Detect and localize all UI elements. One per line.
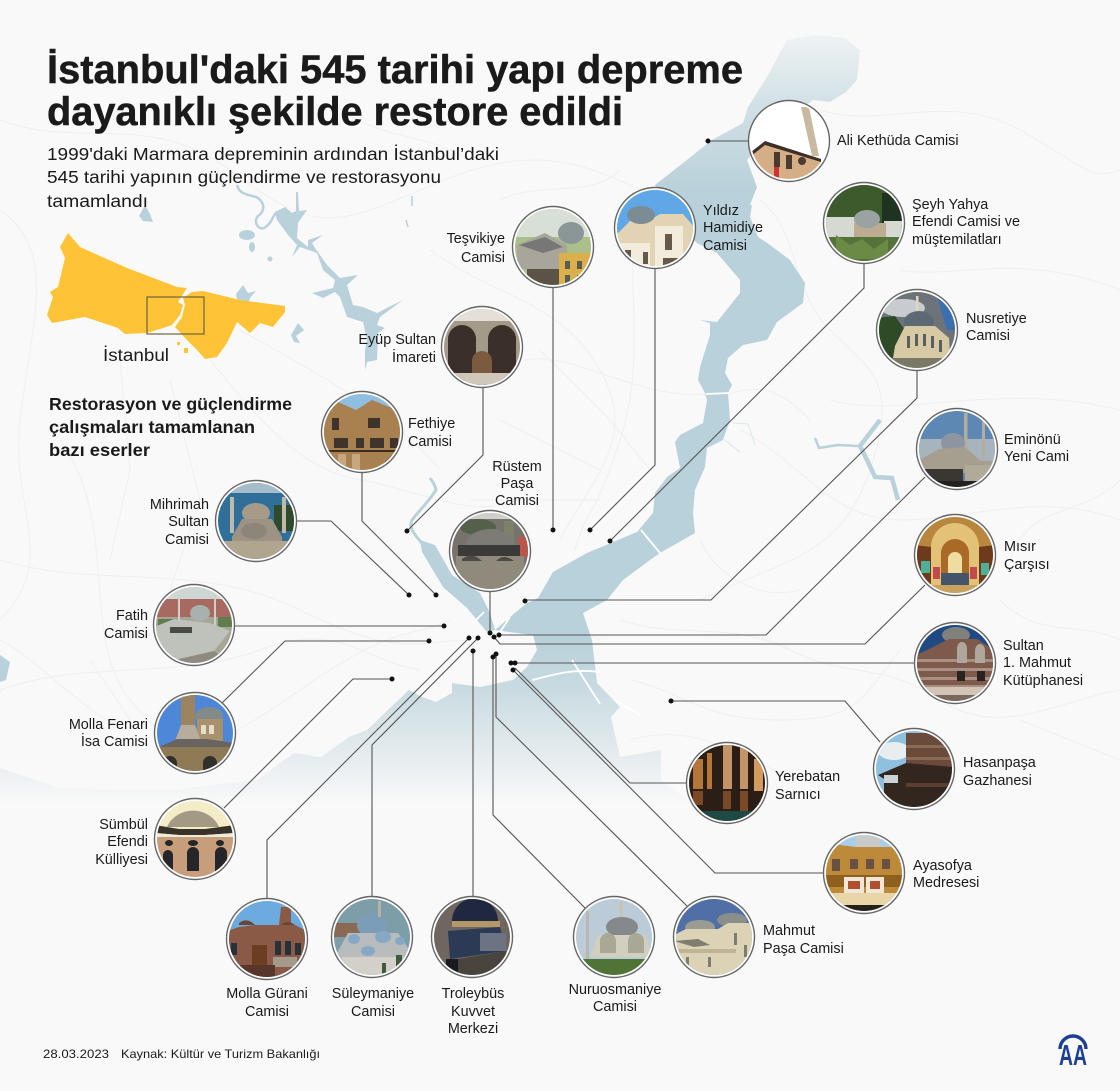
landmark: Sümbül Efendi Külliyesi: Külliyesi bbox=[95, 852, 148, 868]
landmark: Rüstem Paşa Camisi bbox=[450, 459, 542, 592]
landmark: Hasanpaşa Gazhanesi bbox=[874, 728, 1036, 810]
landmark: Molla Fenari İsa Camisi bbox=[69, 692, 236, 774]
landmark: Mısır Çarşısı: Mısır bbox=[1004, 539, 1036, 555]
map: water (Bosphorus, Golden Horn, Marmara, reservoirs) bbox=[0, 35, 898, 810]
landmark: Şeyh Yahya Efendi Camisi ve müştemilatları: Efendi Camisi ve bbox=[912, 214, 1020, 230]
landmark: Nuruosmaniye Camisi bbox=[569, 896, 661, 1015]
landmark: Eyüp Sultan İmareti: Eyüp Sultan bbox=[358, 332, 436, 348]
landmark: Hasanpaşa Gazhanesi: Gazhanesi bbox=[963, 773, 1032, 789]
landmark: Sultan 1. Mahmut Kütüphanesi: Kütüphanesi bbox=[1003, 673, 1083, 689]
landmark: Mısır Çarşısı bbox=[914, 514, 1050, 596]
logo: AA: AA bbox=[1059, 1040, 1087, 1072]
footer: date and source: 28.03.2023 bbox=[43, 1047, 109, 1061]
heading: restored works bbox=[49, 394, 292, 460]
subtitle: 545 tarihi yapının güçlendirme ve restorasyonu bbox=[47, 167, 441, 187]
map: roads bbox=[0, 100, 1120, 780]
landmark: Mihrimah Sultan Camisi: Sultan bbox=[168, 514, 209, 530]
landmark: Fethiye Camisi bbox=[322, 392, 455, 472]
landmark: Rüstem Paşa Camisi: Paşa bbox=[501, 476, 533, 492]
landmark: Fatih Camisi bbox=[104, 584, 234, 666]
heading: restored works: Restorasyon ve güçlendirme bbox=[49, 394, 292, 414]
landmark: Sultan 1. Mahmut Kütüphanesi bbox=[914, 622, 1083, 704]
landmark: Yıldız Hamidiye Camisi: Yıldız bbox=[703, 203, 739, 219]
landmark: Ali Kethüda Camisi: Ali Kethüda Camisi bbox=[837, 133, 959, 149]
landmark: Troleybüs Kuvvet Merkezi: Troleybüs bbox=[442, 986, 504, 1002]
landmark: Eyüp Sultan İmareti bbox=[358, 306, 522, 388]
landmark: Teşvikiye Camisi bbox=[447, 206, 594, 288]
landmark: Molla Gürani Camisi: Camisi bbox=[245, 1004, 289, 1020]
landmark: Troleybüs Kuvvet Merkezi bbox=[432, 896, 512, 1037]
landmark: Molla Fenari İsa Camisi: Molla Fenari bbox=[69, 717, 148, 733]
landmark: Şeyh Yahya Efendi Camisi ve müştemilatları: Şeyh Yahya bbox=[912, 197, 988, 213]
landmark: Nuruosmaniye Camisi: Nuruosmaniye bbox=[569, 982, 661, 998]
landmark: Süleymaniye Camisi: Süleymaniye bbox=[332, 986, 414, 1002]
logo: AA bbox=[1059, 1036, 1087, 1072]
landmark: Ayasofya Medresesi bbox=[824, 832, 979, 914]
heading: restored works: çalışmaları tamamlanan bbox=[49, 417, 255, 437]
landmark: Mahmut Paşa Camisi: Paşa Camisi bbox=[763, 941, 844, 957]
landmark: Eyüp Sultan İmareti: İmareti bbox=[392, 348, 436, 366]
landmark: Eminönü Yeni Cami bbox=[916, 408, 1069, 490]
subtitle: tamamlandı bbox=[47, 191, 148, 211]
landmark: Rüstem Paşa Camisi: Camisi bbox=[495, 493, 539, 509]
landmark: Mihrimah Sultan Camisi: Mihrimah bbox=[150, 497, 209, 513]
landmark: Nusretiye Camisi: Nusretiye bbox=[966, 311, 1027, 327]
landmark: Fethiye Camisi: Camisi bbox=[408, 434, 452, 450]
title: İstanbul'daki 545 tarihi yapı depreme bbox=[47, 48, 743, 92]
landmark: Molla Gürani Camisi: Molla Gürani bbox=[226, 986, 308, 1002]
landmark: Fatih Camisi: Camisi bbox=[104, 626, 148, 642]
landmark: Nusretiye Camisi: Camisi bbox=[966, 328, 1010, 344]
landmark: Mısır Çarşısı: Çarşısı bbox=[1004, 557, 1050, 573]
subtitle bbox=[47, 144, 499, 211]
landmark: Sultan 1. Mahmut Kütüphanesi: Sultan bbox=[1003, 638, 1044, 654]
landmark: Mihrimah Sultan Camisi bbox=[150, 480, 296, 562]
landmark: Yıldız Hamidiye Camisi: Camisi bbox=[703, 238, 747, 254]
title bbox=[47, 48, 743, 134]
landmark: Yerebatan Sarnıcı bbox=[686, 742, 840, 824]
landmark: Yıldız Hamidiye Camisi: Hamidiye bbox=[703, 220, 763, 236]
landmark: Ayasofya Medresesi: Ayasofya bbox=[913, 858, 972, 874]
landmark: Şeyh Yahya Efendi Camisi ve müştemilatları: müştemilatları bbox=[912, 232, 1002, 248]
landmark: Eminönü Yeni Cami: Eminönü bbox=[1004, 432, 1061, 448]
landmark: Troleybüs Kuvvet Merkezi: Kuvvet bbox=[451, 1004, 495, 1020]
landmark: Süleymaniye Camisi: Camisi bbox=[351, 1004, 395, 1020]
subtitle: 1999'daki Marmara depreminin ardından İstanbul’daki bbox=[47, 144, 499, 164]
landmark: Fatih Camisi: Fatih bbox=[116, 608, 148, 624]
footer: date and source bbox=[43, 1047, 320, 1061]
landmark: Eminönü Yeni Cami: Yeni Cami bbox=[1004, 449, 1069, 465]
landmark: Mahmut Paşa Camisi bbox=[674, 896, 844, 978]
landmark: Teşvikiye Camisi: Teşvikiye bbox=[447, 231, 505, 247]
landmark: Ali Kethüda Camisi bbox=[748, 100, 959, 182]
landmark: Sümbül Efendi Külliyesi: Sümbül bbox=[99, 817, 148, 833]
title: dayanıklı şekilde restore edildi bbox=[47, 90, 623, 134]
landmark: Teşvikiye Camisi: Camisi bbox=[461, 250, 505, 266]
landmark: Troleybüs Kuvvet Merkezi: Merkezi bbox=[448, 1021, 498, 1037]
landmark: Fethiye Camisi: Fethiye bbox=[408, 416, 455, 432]
landmark: Rüstem Paşa Camisi: Rüstem bbox=[492, 459, 542, 475]
landmark: Sümbül Efendi Külliyesi bbox=[95, 798, 236, 880]
heading: restored works: bazı eserler bbox=[49, 440, 150, 460]
landmark: Hasanpaşa Gazhanesi: Hasanpaşa bbox=[963, 755, 1036, 771]
landmark: Molla Fenari İsa Camisi: İsa Camisi bbox=[81, 732, 148, 750]
landmark: Molla Gürani Camisi bbox=[226, 898, 308, 1020]
landmark: Mahmut Paşa Camisi: Mahmut bbox=[763, 923, 815, 939]
landmark: Yerebatan Sarnıcı: Yerebatan bbox=[775, 769, 840, 785]
landmark: Süleymaniye Camisi bbox=[332, 896, 414, 1020]
landmark: Sümbül Efendi Külliyesi: Efendi bbox=[107, 834, 148, 850]
landmark: Nuruosmaniye Camisi: Camisi bbox=[593, 999, 637, 1015]
landmark: Sultan 1. Mahmut Kütüphanesi: 1. Mahmut bbox=[1003, 655, 1071, 671]
landmark: Şeyh Yahya Efendi Camisi ve müştemilatları bbox=[824, 182, 1020, 264]
locator map of Istanbul: İstanbul bbox=[103, 345, 169, 365]
landmark: Ayasofya Medresesi: Medresesi bbox=[913, 875, 979, 891]
leader lines and location dots bbox=[222, 138, 925, 908]
landmark: Yerebatan Sarnıcı: Sarnıcı bbox=[775, 787, 821, 803]
landmark: Mihrimah Sultan Camisi: Camisi bbox=[165, 532, 209, 548]
landmark: Yıldız Hamidiye Camisi bbox=[614, 188, 763, 268]
landmark: Nusretiye Camisi bbox=[876, 290, 1027, 370]
footer: date and source: Kaynak: Kültür ve Turizm Bakanlığı bbox=[121, 1047, 320, 1061]
locator map of Istanbul bbox=[47, 233, 285, 365]
